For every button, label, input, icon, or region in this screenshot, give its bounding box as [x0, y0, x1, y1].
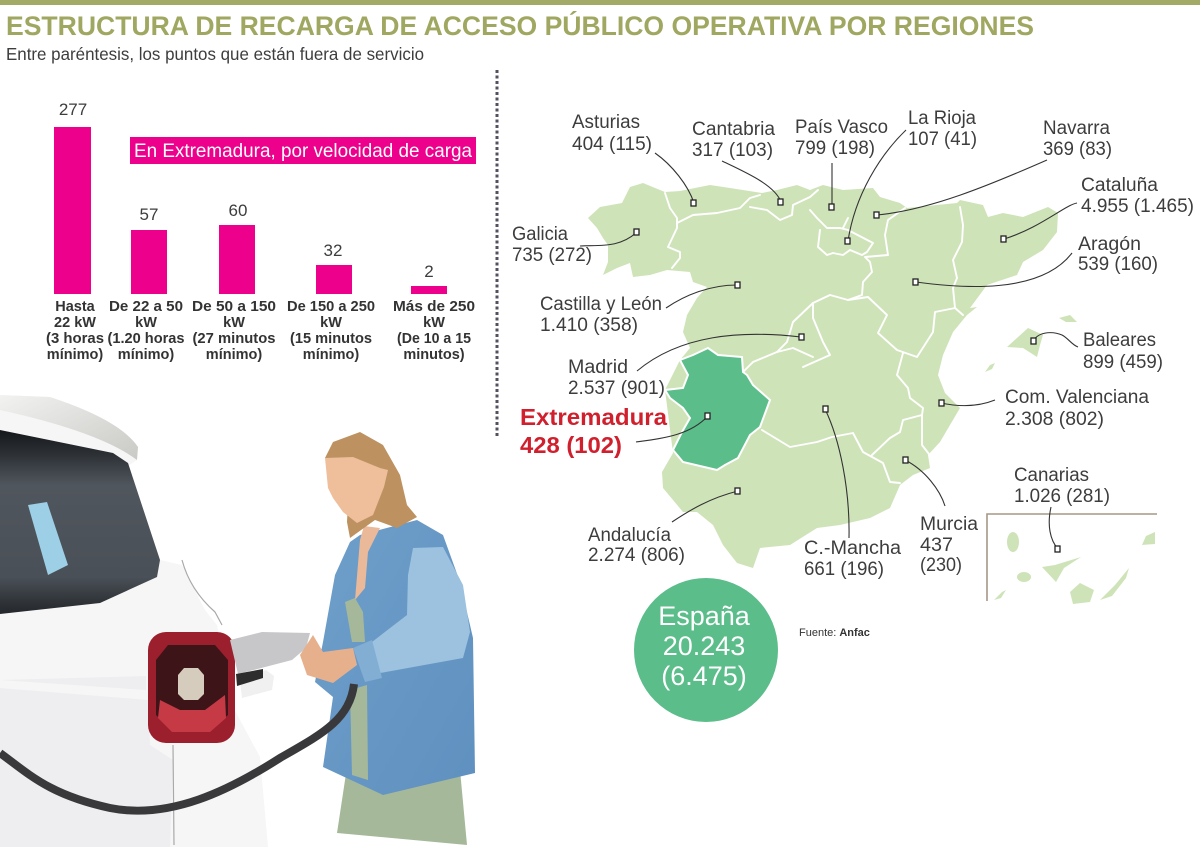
- label: Murcia: Murcia: [920, 514, 978, 535]
- label: Cataluña: [1081, 175, 1194, 217]
- label: Castilla y León: [540, 294, 662, 336]
- woman dress: [337, 767, 467, 845]
- Canarias inset: [987, 514, 1157, 604]
- label: Andalucía: Andalucía: [588, 525, 671, 546]
- label: Navarra: Navarra: [1043, 118, 1110, 139]
- car body: [0, 395, 268, 847]
- label: C.-Mancha: [804, 538, 901, 580]
- sleeve cuff: [353, 640, 382, 682]
- map of Spain: [588, 183, 1157, 604]
- photo: woman charging white car: [0, 395, 475, 847]
- label: Asturias: 404 (115): [572, 134, 652, 155]
- label: Extremadura: 428 (102): [520, 432, 622, 458]
- label: Asturias: [572, 112, 652, 155]
- label: Cataluña: Cataluña: [1081, 175, 1158, 196]
- label: Extremadura: Extremadura: [520, 404, 667, 430]
- Extremadura highlighted: [665, 348, 770, 470]
- label: Castilla y León: Castilla y León: [540, 294, 662, 315]
- category label 4: mínimo): [303, 347, 359, 363]
- bar: 150 a 250 kW: [316, 241, 352, 294]
- Baleares: [985, 315, 1077, 372]
- España total circle: [634, 578, 778, 722]
- woman hands: [300, 635, 357, 683]
- category label 4: (15 minutos: [290, 331, 372, 347]
- label: La Rioja: 107 (41): [908, 129, 977, 150]
- category label 3: (27 minutos: [192, 331, 276, 347]
- bar: 50 a 150 kW: 60: [229, 201, 247, 220]
- category label 1: Hasta: [55, 299, 96, 315]
- bar: más de 250 kW: 2: [424, 262, 434, 281]
- category label 2: mínimo): [118, 347, 174, 363]
- car spoiler: [0, 395, 138, 460]
- mainland: [588, 183, 1058, 568]
- charging cable: [0, 684, 354, 811]
- bar: hasta 22 kW: [54, 100, 91, 294]
- leader lines and markers: [580, 130, 1078, 552]
- label: Extremadura: [520, 404, 667, 458]
- woman jacket: [315, 520, 475, 795]
- label: Baleares: [1083, 330, 1163, 373]
- woman face: [325, 457, 388, 523]
- label: País Vasco: 799 (198): [795, 138, 875, 159]
- label: Baleares: Baleares: [1083, 330, 1156, 351]
- category label 5: minutos): [403, 347, 465, 363]
- category label 4: kW: [320, 315, 342, 331]
- category label 2: De 22 a 50: [109, 299, 183, 315]
- España total circle: 20.243: [663, 631, 745, 661]
- category label 1: mínimo): [47, 347, 103, 363]
- label: Navarra: [1043, 118, 1112, 160]
- label: Com. Valenciana: 2.308 (802): [1005, 409, 1104, 430]
- woman hair: [325, 432, 417, 538]
- label: Com. Valenciana: [1005, 387, 1149, 430]
- label: Madrid: Madrid: [568, 357, 628, 378]
- label: Cataluña: 4.955 (1.465): [1081, 196, 1194, 217]
- category label 4: De 150 a 250: [287, 299, 375, 315]
- car rear window: [0, 430, 160, 614]
- label: Madrid: [568, 357, 665, 399]
- label: Canarias: 1.026 (281): [1014, 486, 1110, 507]
- label: País Vasco: País Vasco: [795, 117, 888, 138]
- label: Murcia: (230): [920, 555, 962, 576]
- chart legend: En Extremadura, por velocidad de carga: [134, 140, 472, 162]
- label: C.-Mancha: C.-Mancha: [804, 538, 901, 559]
- category label 5: Más de 250: [393, 299, 475, 315]
- category label 4: [287, 299, 375, 363]
- category label 5: kW: [423, 315, 445, 331]
- label: Galicia: [512, 224, 592, 266]
- category label 2: [108, 299, 184, 363]
- regional borders: [665, 190, 963, 483]
- source: Fuente: Anfac: [799, 627, 870, 639]
- label: Baleares: 899 (459): [1083, 352, 1163, 373]
- label: Com. Valenciana: Com. Valenciana: [1005, 387, 1149, 408]
- subtitle: Entre paréntesis, los puntos que están fuera de servicio: [6, 44, 424, 64]
- label: Cantabria: Cantabria: [692, 119, 775, 140]
- label: La Rioja: La Rioja: [908, 108, 976, 129]
- label: Castilla y León: 1.410 (358): [540, 315, 638, 336]
- category label 3: De 50 a 150: [192, 299, 276, 315]
- label: Galicia: Galicia: [512, 224, 568, 245]
- label: Canarias: Canarias: [1014, 465, 1089, 486]
- bar: 50 a 150 kW: [219, 201, 255, 294]
- label: Murcia: [920, 514, 978, 576]
- title: ESTRUCTURA DE RECARGA DE ACCESO PÚBLICO OPERATIVA POR REGIONES: [6, 10, 1034, 41]
- España total circle: España: [658, 601, 751, 631]
- category label 2: kW: [135, 315, 157, 331]
- bar: 22 a 50 kW: 57: [140, 205, 158, 224]
- category label 3: [192, 299, 276, 363]
- bar chart: charging speed in Extremadura: [46, 100, 476, 363]
- label: C.-Mancha: 661 (196): [804, 559, 884, 580]
- label: Madrid: 2.537 (901): [568, 378, 665, 399]
- label: La Rioja: [908, 108, 977, 150]
- top bar: [0, 0, 1200, 5]
- category label 1: 22 kW: [54, 315, 96, 331]
- bar: 150 a 250 kW: 32: [324, 241, 342, 260]
- label: Cantabria: [692, 119, 775, 161]
- bar: más de 250 kW: [411, 262, 447, 294]
- label: Asturias: Asturias: [572, 112, 640, 133]
- label: País Vasco: [795, 117, 888, 159]
- category label 3: mínimo): [206, 347, 262, 363]
- label: Aragón: Aragón: [1078, 234, 1141, 255]
- category label 5: (De 10 a 15: [397, 331, 471, 347]
- category label 1: (3 horas: [46, 331, 104, 347]
- dress and neckline: [345, 526, 380, 780]
- label: Cantabria: 317 (103): [692, 140, 773, 161]
- label: Navarra: 369 (83): [1043, 139, 1112, 160]
- España total circle: (6.475): [661, 661, 747, 691]
- charger connector: [230, 632, 310, 698]
- bar: hasta 22 kW: 277: [59, 100, 87, 119]
- category label 2: (1.20 horas: [108, 331, 184, 347]
- tail light: [148, 632, 235, 743]
- category label 3: kW: [223, 315, 245, 331]
- label: Aragón: [1078, 234, 1158, 275]
- category label 1: [46, 299, 104, 363]
- label: Andalucía: 2.274 (806): [588, 545, 685, 566]
- label: Murcia: 437: [920, 535, 953, 556]
- jacket sleeve: [372, 547, 470, 673]
- label: Canarias: [1014, 465, 1110, 507]
- category label 5: [393, 299, 475, 363]
- label: Aragón: 539 (160): [1078, 254, 1158, 275]
- label: Galicia: 735 (272): [512, 245, 592, 266]
- bar: 22 a 50 kW: [131, 205, 167, 294]
- label: Andalucía: [588, 525, 685, 566]
